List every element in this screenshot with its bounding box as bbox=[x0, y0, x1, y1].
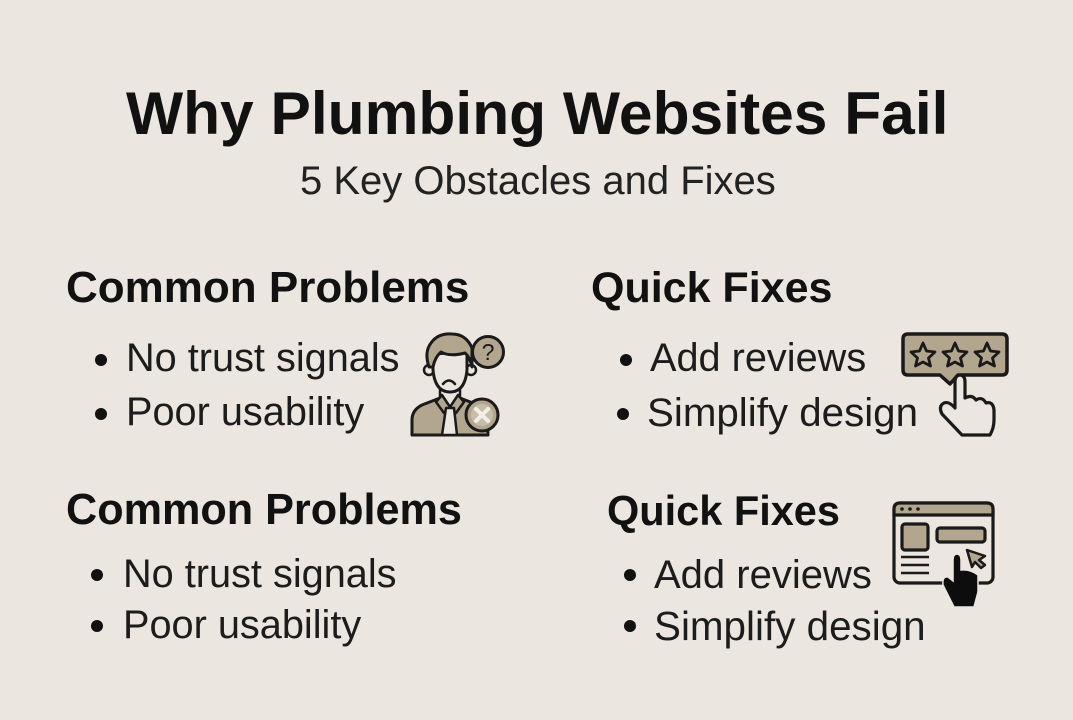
subtitle: 5 Key Obstacles and Fixes bbox=[300, 159, 776, 203]
list item: no trust signals: No trust signals bbox=[123, 552, 397, 596]
question bubble: ? bbox=[482, 339, 494, 365]
bullet bbox=[95, 354, 107, 366]
heading: Quick Fixes bbox=[607, 487, 840, 534]
icon: website layout with hand cursor bbox=[892, 501, 995, 606]
heading: Common Problems bbox=[66, 263, 469, 312]
title: Why Plumbing Websites Fail bbox=[126, 79, 948, 147]
panel: quick fixes top bbox=[591, 264, 918, 435]
panel: common problems bottom bbox=[66, 486, 462, 647]
list item: simplify design: Simplify design bbox=[654, 603, 926, 649]
list item: no trust signals: No trust signals bbox=[126, 336, 400, 380]
list item: add reviews: Add reviews bbox=[654, 553, 872, 597]
bullet bbox=[91, 620, 103, 632]
bullet bbox=[620, 354, 632, 366]
bullet bbox=[91, 569, 103, 581]
panel: quick fixes bottom bbox=[607, 487, 926, 649]
list item: add reviews: Add reviews bbox=[650, 336, 866, 380]
bullet bbox=[624, 569, 636, 581]
bullet bbox=[617, 408, 629, 420]
x badge bbox=[466, 399, 498, 431]
bullet bbox=[95, 408, 107, 420]
icon: star rating with pointer bbox=[901, 332, 1009, 437]
heading: Quick Fixes bbox=[591, 264, 832, 312]
icon: confused person bbox=[410, 332, 505, 436]
heading: Common Problems bbox=[66, 486, 462, 534]
bullet bbox=[624, 620, 636, 632]
panel: common problems top bbox=[66, 263, 469, 434]
list item: poor usability: Poor usability bbox=[123, 603, 361, 647]
list item: simplify design: Simplify design bbox=[647, 390, 918, 435]
list item: poor usability: Poor usability bbox=[126, 390, 364, 434]
